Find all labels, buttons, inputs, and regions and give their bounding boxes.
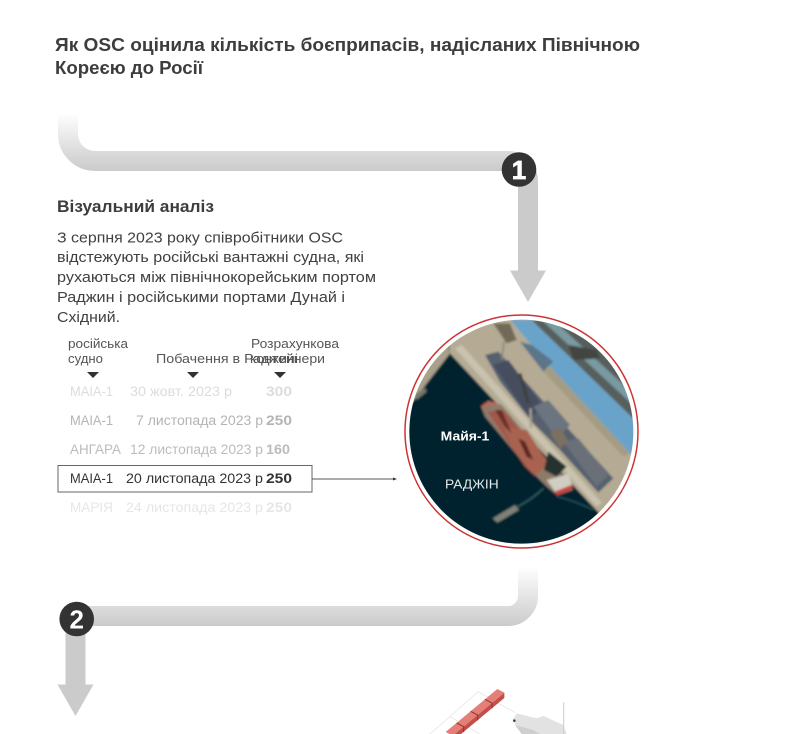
- text block: description: Східний.: [57, 310, 120, 326]
- infographic: [55, 37, 640, 734]
- table row: Maia-1, 30 Oct: [70, 384, 292, 399]
- red containers: [446, 689, 504, 734]
- table row: Maria, 24 Nov: 24 листопада 2023 р: [126, 500, 263, 515]
- table row: Maia-1, 30 Oct: МАІА-1: [70, 384, 113, 399]
- label: port name: РАДЖІН: [445, 476, 499, 491]
- heading: visual analysis: Візуальний аналіз: [57, 198, 214, 216]
- table row: Angara, 12 Nov: 160: [266, 442, 290, 457]
- grey vessel part: [513, 702, 567, 734]
- arrow: row to satellite image: [312, 478, 397, 480]
- text block: description: відстежують російські вантажні судна, які: [57, 250, 364, 266]
- table column headers: контейнери: [250, 351, 325, 366]
- title: Кореєю до Росії: [55, 58, 204, 78]
- title: Як OSC оцінила кількість боєприпасів, надісланих Північною: [55, 35, 640, 55]
- text block: description: З серпня 2023 року співробітники OSC: [57, 230, 343, 246]
- table row: Maia-1, 7 Nov: [70, 413, 292, 428]
- icon: step number 1: [502, 152, 536, 187]
- table row: Maria, 24 Nov: МАРІЯ: [70, 500, 113, 515]
- text block: description: Раджин і російськими портами Дунай і: [57, 290, 345, 306]
- satellite image circle: [400, 310, 647, 550]
- icon: step number 2: 2: [69, 604, 84, 634]
- table row: Maia-1, 30 Oct: 30 жовт. 2023 р: [130, 384, 232, 399]
- table column headers: судно: [68, 351, 103, 366]
- table row: Angara, 12 Nov: [70, 442, 290, 457]
- table row: Maria, 24 Nov: 250: [266, 500, 292, 515]
- table row: Angara, 12 Nov: 12 листопада 2023 р: [130, 442, 263, 457]
- deck grid: [430, 692, 515, 734]
- table row: Maia-1, 20 Nov, highlighted: 250: [266, 471, 292, 486]
- icon: step number 2: [59, 602, 94, 636]
- table column headers: Побачення в Раджині: [156, 351, 298, 366]
- illustration: containers and vessel: [430, 689, 567, 734]
- table column headers: російська: [68, 336, 129, 351]
- table row: Maia-1, 20 Nov, highlighted: 20 листопада 2023 р: [126, 471, 263, 486]
- label: ship name: Майя-1: [441, 429, 489, 444]
- icon: step number 1: 1: [512, 155, 526, 185]
- arrow: step 2 flow line: [58, 566, 528, 716]
- arrow: step 1 flow line: [68, 113, 546, 302]
- text block: description: рухаються між північнокорейським портом: [57, 270, 376, 286]
- text block: description: [57, 230, 376, 326]
- table row: Maia-1, 7 Nov: 250: [266, 413, 292, 428]
- table row: Maia-1, 20 Nov, highlighted: МАІА-1: [70, 471, 113, 486]
- table row: Maria, 24 Nov: [70, 500, 292, 515]
- table: shipments: [58, 336, 340, 515]
- table row: Maia-1, 7 Nov: МАІА-1: [70, 413, 113, 428]
- table row: Maia-1, 7 Nov: 7 листопада 2023 р: [136, 413, 263, 428]
- table row: Maia-1, 20 Nov, highlighted: [58, 466, 312, 492]
- table column headers: Розрахункова: [251, 336, 340, 351]
- table row: Angara, 12 Nov: АНГАРА: [70, 442, 121, 457]
- table column headers: [68, 336, 340, 378]
- table row: Maia-1, 30 Oct: 300: [266, 384, 292, 399]
- title: [55, 35, 640, 78]
